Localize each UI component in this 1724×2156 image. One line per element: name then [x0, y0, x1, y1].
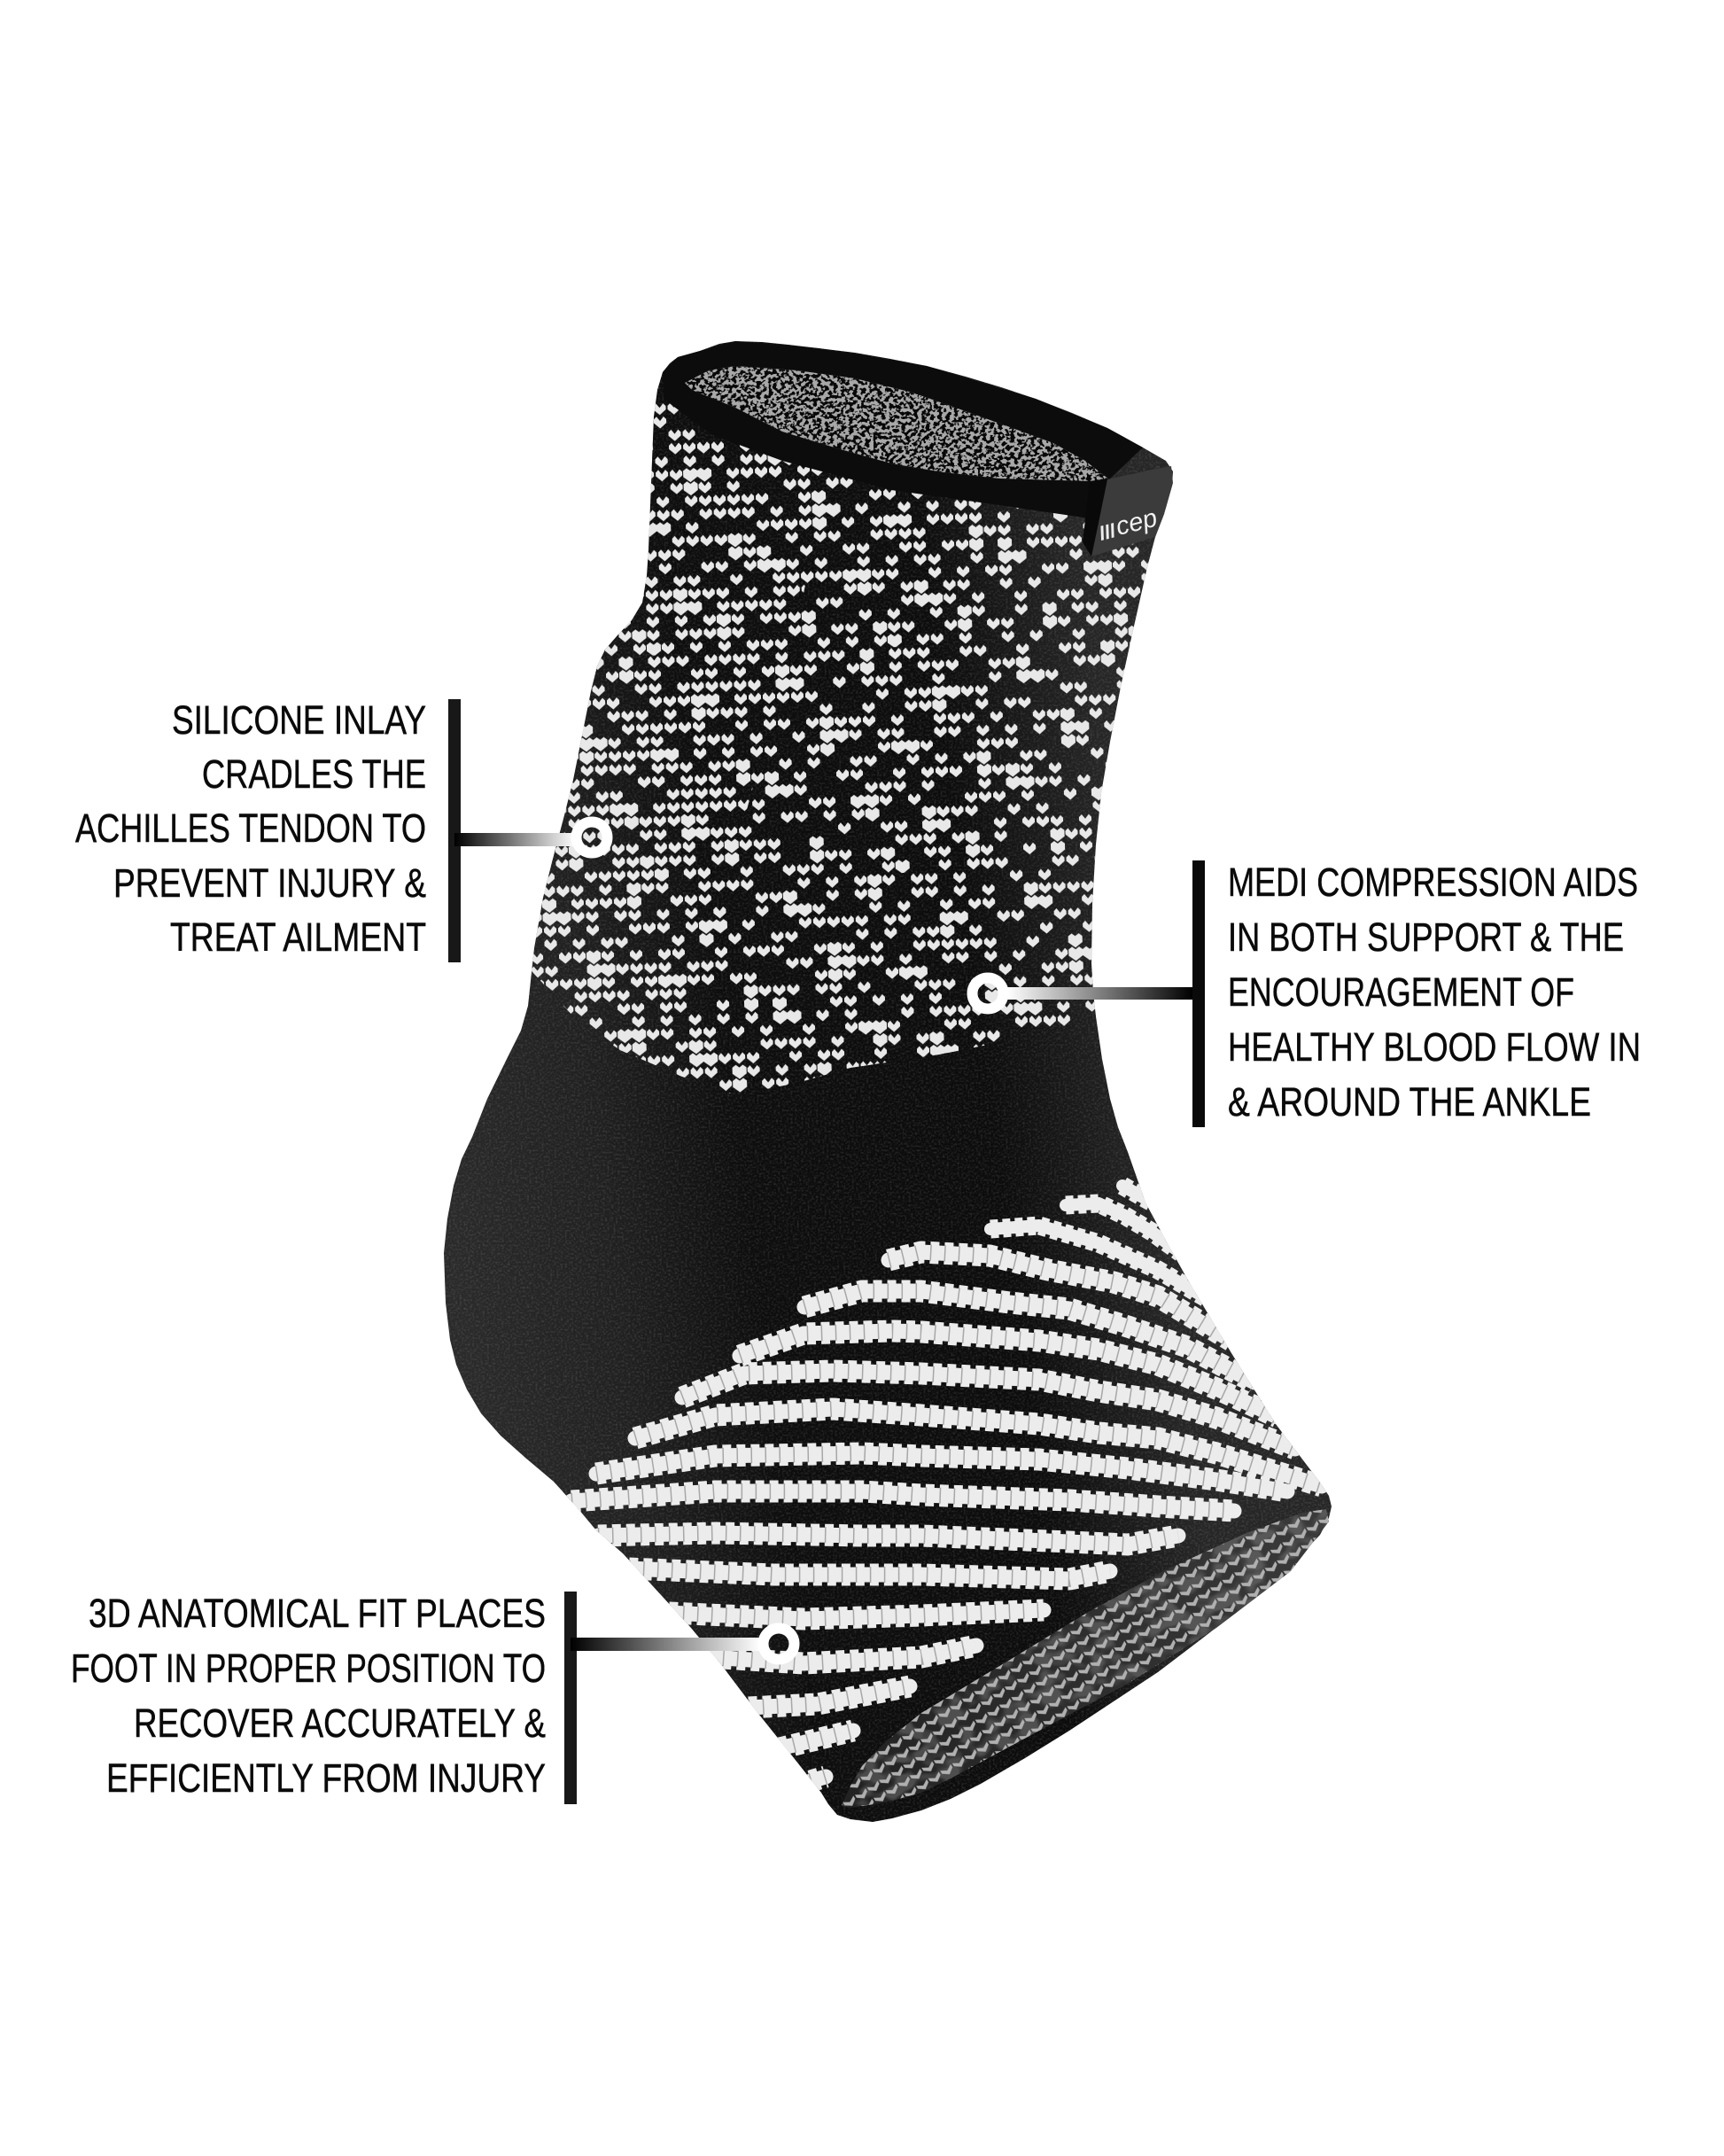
marker ring	[576, 822, 608, 852]
text: medi compression description: IN BOTH SUPPORT & THE	[1228, 915, 1624, 960]
black front tab edge	[1083, 479, 1107, 557]
text: 3D anatomical fit description: EFFICIENTLY FROM INJURY	[106, 1755, 546, 1801]
callout: 3D anatomical fit	[71, 1591, 794, 1804]
callout: medi compression	[973, 860, 1641, 1127]
speckled knit pattern on upper sleeve	[532, 388, 1166, 1094]
gradient connector line	[571, 1638, 760, 1651]
sleeve knit base	[425, 328, 1347, 1834]
top cuff band	[663, 341, 1143, 518]
text: silicone inlay description: ACHILLES TENDON TO	[75, 806, 426, 851]
text: medi compression description: ENCOURAGEMENT OF	[1228, 969, 1574, 1015]
gradient connector line	[1007, 987, 1192, 1000]
text: 3D anatomical fit description: FOOT IN PROPER POSITION TO	[71, 1646, 546, 1691]
marker ring	[764, 1629, 794, 1659]
label logo: cep	[1113, 504, 1160, 541]
ankle sleeve product illustration	[425, 328, 1347, 1834]
label logo	[1096, 504, 1160, 546]
text: 3D anatomical fit description: 3D ANATOMICAL FIT PLACES	[89, 1591, 546, 1636]
text: 3D anatomical fit description	[71, 1591, 546, 1801]
vertical bracket bar	[1192, 860, 1205, 1127]
vertical bracket bar	[564, 1592, 577, 1804]
text: silicone inlay description: SILICONE INLAY	[172, 697, 426, 743]
callout: silicone inlay	[75, 697, 608, 962]
grey woven label	[1091, 466, 1173, 557]
text: medi compression description	[1228, 860, 1641, 1125]
bottom opening interior knit	[833, 1498, 1338, 1817]
text: 3D anatomical fit description: RECOVER ACCURATELY &	[134, 1701, 546, 1746]
text: silicone inlay description: TREAT AILMENT	[170, 915, 426, 960]
text: medi compression description: & AROUND THE ANKLE	[1228, 1079, 1591, 1125]
gradient connector line	[454, 833, 576, 846]
top opening interior knit	[685, 366, 1109, 481]
text: silicone inlay description: CRADLES THE	[202, 751, 426, 797]
vertical bracket bar	[448, 699, 461, 962]
text: silicone inlay description: PREVENT INJURY &	[113, 860, 426, 906]
marker ring	[973, 978, 1003, 1008]
text: silicone inlay description	[75, 697, 426, 960]
diagonal white stripes	[571, 1186, 1322, 1781]
